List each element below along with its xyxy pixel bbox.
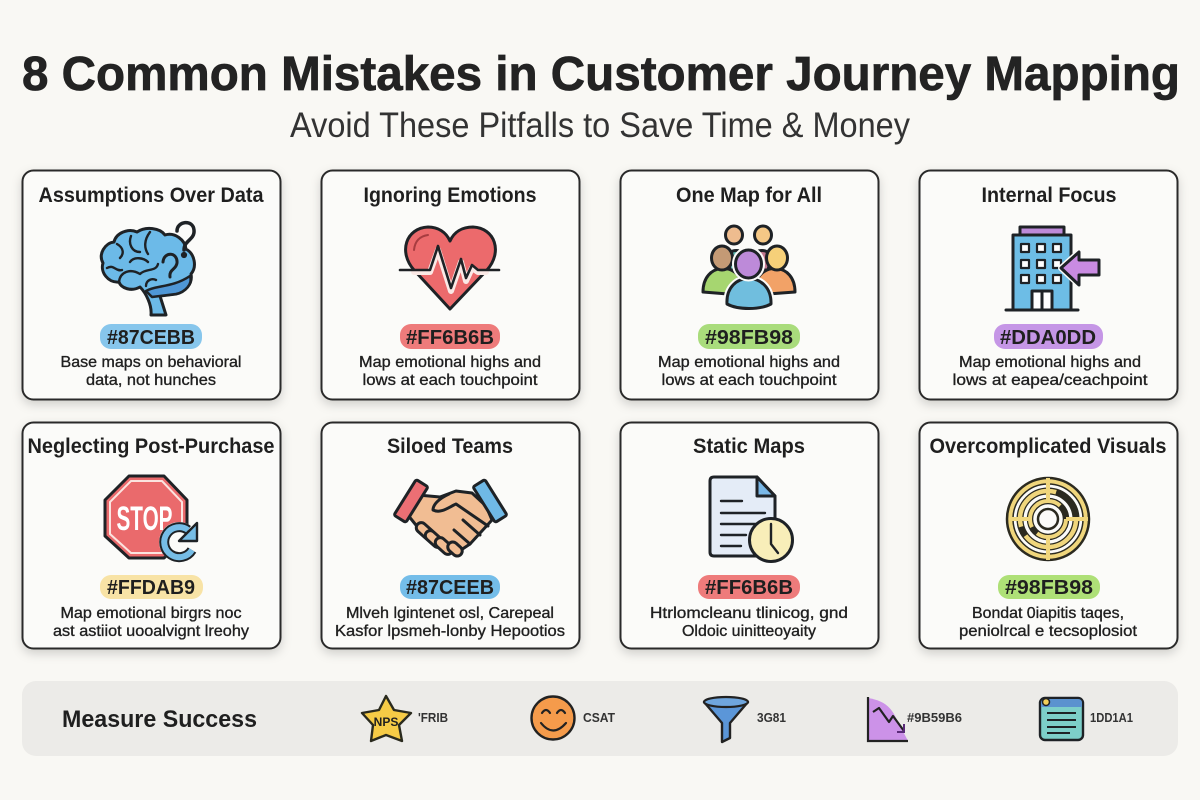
icon: brain with question mark: [101, 223, 194, 315]
metric: NPS star: 'FRIB: [418, 710, 448, 725]
icon: stop sign with refresh arrow: STOP: [116, 500, 172, 538]
panel: Neglecting Post-Purchase: [22, 422, 280, 648]
description: lows at each touchpoint: [662, 372, 837, 389]
heading: Siloed Teams: Siloed Teams: [387, 434, 513, 458]
description: [359, 354, 541, 389]
subtitle: Avoid These Pitfalls to Save Time & Money: [290, 106, 910, 145]
pill: #FFDAB9: #FFDAB9: [107, 577, 195, 599]
description: [658, 354, 840, 389]
heading: Overcomplicated Visuals: Overcomplicated Visuals: [930, 434, 1167, 458]
pill: #98FB98: #98FB98: [705, 327, 793, 349]
description: [650, 605, 848, 640]
description: Base maps on behavioral: [60, 354, 241, 371]
panel: Static Maps: [620, 422, 878, 648]
heading: Ignoring Emotions: Ignoring Emotions: [364, 183, 537, 207]
metric: NPS star: [362, 696, 448, 741]
description: Map emotional birgrs noc: [60, 605, 242, 622]
icon: document with clock: [710, 477, 792, 562]
description: [335, 605, 565, 640]
metric: funnel: [704, 697, 786, 742]
description: [952, 354, 1148, 389]
pill: #DDA0DD: #DDA0DD: [1000, 327, 1096, 349]
description: [53, 605, 249, 640]
panel: Siloed Teams: [322, 422, 580, 648]
icon: handshake: [394, 479, 507, 558]
heading: Measure Success: Measure Success: [62, 706, 257, 733]
title: 8 Common Mistakes in Customer Journey Mapping: [22, 48, 1180, 101]
metric: funnel: 3G81: [757, 710, 786, 725]
metric: CSAT smile: CSAT: [583, 710, 615, 725]
description: [959, 605, 1138, 640]
heading: Internal Focus: Internal Focus: [982, 183, 1117, 207]
icon: building with inward arrow: [1006, 227, 1099, 310]
pill: #87CEEB: #87CEEB: [406, 577, 494, 599]
description: Kasfor lpsmeh-lonby Hepootios: [335, 623, 565, 640]
description: peniolrcal e tecsoplosiot: [959, 623, 1138, 640]
icon: heart with pulse: [400, 227, 499, 309]
panel: Assumptions Over Data: [22, 170, 280, 400]
metric: CSAT smile: [532, 696, 615, 740]
description: Htrlomcleanu tlinicog, gnd: [650, 605, 848, 622]
description: data, not hunches: [86, 372, 216, 389]
description: Mlveh lgintenet osl, Carepeal: [346, 605, 554, 622]
panel: One Map for All: [620, 170, 878, 400]
description: ast astiiot uooalvignt lreohy: [53, 623, 249, 640]
metric: declining chart: [868, 697, 962, 741]
metric: dashboard window: [1040, 698, 1133, 740]
panel: Internal Focus: [920, 170, 1178, 400]
icon: maze: [1007, 478, 1089, 560]
heading: Neglecting Post-Purchase: Neglecting Post-Purchase: [28, 434, 275, 458]
panel: Measure Success bar: [22, 681, 1178, 756]
panel: Overcomplicated Visuals: [920, 422, 1178, 648]
metric: dashboard window: 1DD1A1: [1090, 710, 1133, 725]
description: lows at each touchpoint: [362, 372, 538, 389]
description: Map emotional highs and: [359, 354, 541, 371]
heading: Static Maps: Static Maps: [693, 434, 805, 458]
pill: #87CEBB: #87CEBB: [107, 327, 195, 349]
description: [60, 354, 241, 389]
icon: stop sign with refresh arrow: [105, 476, 199, 562]
pill: #FF6B6B: #FF6B6B: [406, 327, 494, 349]
description: Bondat 0iapitis taqes,: [972, 605, 1124, 622]
panel: Ignoring Emotions: [322, 170, 580, 400]
description: lows at eapea/ceachpoint: [952, 372, 1148, 389]
description: Map emotional highs and: [959, 354, 1141, 371]
metric: declining chart: #9B59B6: [907, 710, 962, 725]
description: Oldoic uinitteoyaity: [682, 623, 816, 640]
icon: group of people: [703, 226, 795, 308]
metric: NPS star: NPS: [374, 715, 398, 729]
heading: One Map for All: One Map for All: [676, 183, 822, 207]
pill: #FF6B6B: #FF6B6B: [705, 577, 793, 599]
description: Map emotional highs and: [658, 354, 840, 371]
heading: Assumptions Over Data: Assumptions Over Data: [38, 183, 264, 207]
pill: #98FB98: #98FB98: [1005, 577, 1093, 599]
